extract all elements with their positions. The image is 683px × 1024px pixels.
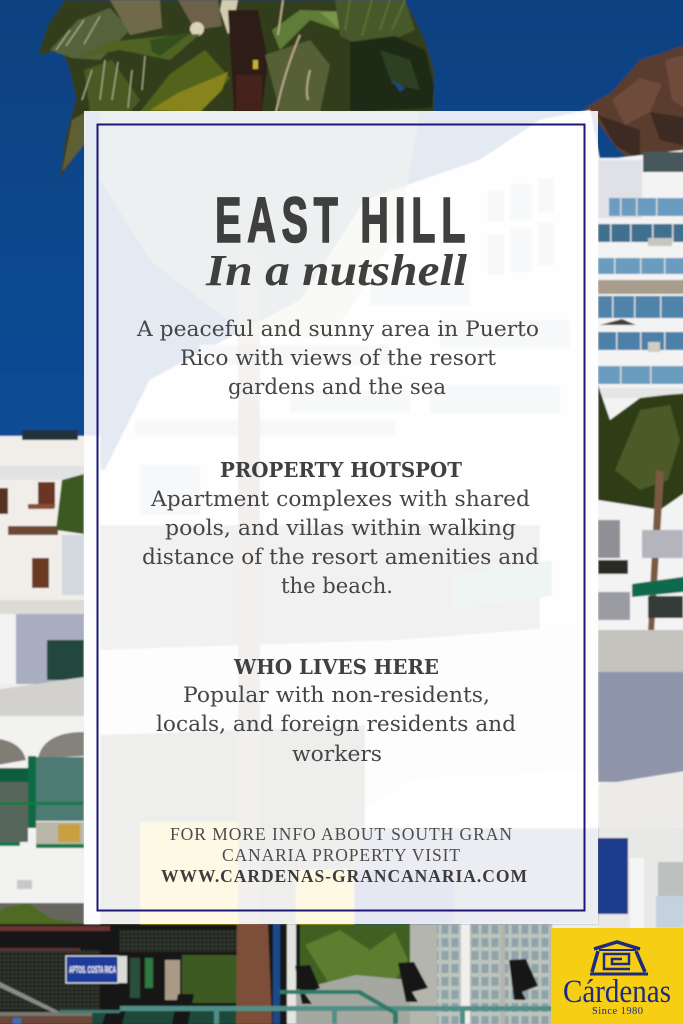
body: who lives here: workers xyxy=(292,742,382,766)
lower base wall colour xyxy=(0,470,683,940)
crown dense mass xyxy=(38,0,434,178)
panel inner border xyxy=(98,124,584,910)
footer call to action: FOR MORE INFO ABOUT SOUTH GRAN xyxy=(170,824,512,844)
footer call to action: CANARIA PROPERTY VISIT xyxy=(222,845,460,865)
body: who lives here xyxy=(156,683,516,766)
floodlights xyxy=(102,959,538,1024)
bright fan leaves xyxy=(78,34,200,60)
logo: Cardenas yellow badge xyxy=(551,928,683,1024)
trunk core xyxy=(228,10,268,112)
building window grid behind panel xyxy=(135,178,570,515)
palm trunk base xyxy=(236,924,272,1024)
pale dead fronds top xyxy=(110,0,162,35)
rocky hillside xyxy=(585,38,683,175)
wordmark: Cárdenas xyxy=(563,974,671,1010)
crown ghost tint under panel xyxy=(100,111,420,340)
panel: translucent white card xyxy=(84,111,598,924)
tagline: Since 1980 xyxy=(592,1006,643,1017)
intro text xyxy=(136,317,539,399)
right palm tree xyxy=(598,385,683,632)
mid garden behind panel xyxy=(100,525,540,650)
body: property hotspot: Apartment complexes with shared xyxy=(150,487,530,511)
thin pale frond lines xyxy=(56,16,145,108)
lower dark foliage behind panel xyxy=(100,725,365,925)
body: who lives here: locals, and foreign residents and xyxy=(156,712,516,736)
right apartment block xyxy=(598,158,683,633)
footer call to action xyxy=(161,824,527,886)
street sign: Costa Rica: APTOS. COSTA RICA xyxy=(69,965,116,976)
ground floor street xyxy=(0,924,552,1024)
central trunk ghost behind panel xyxy=(238,200,260,924)
body: who lives here: Popular with non-residents, xyxy=(183,683,490,707)
section: who lives here xyxy=(156,655,516,766)
intro text: A peaceful and sunny area in Puerto xyxy=(136,317,539,341)
body: property hotspot: pools, and villas within walking xyxy=(165,516,516,540)
right bright leaves xyxy=(272,10,366,50)
heading: who lives here: WHO LIVES HERE xyxy=(233,655,439,679)
left hanging fronds xyxy=(50,8,130,60)
heading: property hotspot: PROPERTY HOTSPOT xyxy=(220,458,463,482)
intro text: Rico with views of the resort xyxy=(180,346,497,370)
dark right fronds xyxy=(350,36,434,112)
foliage and wall, centre xyxy=(300,924,410,988)
subtitle: In a nutshell xyxy=(205,246,468,295)
body: property hotspot: the beach. xyxy=(281,574,393,598)
teal railings xyxy=(120,1006,552,1011)
section: property hotspot xyxy=(142,458,539,598)
icon: house with spiral xyxy=(590,942,648,974)
website link: WWW.CARDENAS-GRANCANARIA.COM xyxy=(161,866,527,886)
street sign: Costa Rica xyxy=(66,956,127,983)
sky xyxy=(0,0,683,480)
intro text: gardens and the sea xyxy=(228,375,446,399)
left terraced buildings xyxy=(0,436,100,606)
yellow signboards behind panel xyxy=(140,822,240,924)
upper main building behind panel xyxy=(100,110,683,640)
central palm crown xyxy=(38,0,434,340)
body: property hotspot: distance of the resort amenities and xyxy=(142,545,539,569)
title: EAST HILL xyxy=(215,186,465,256)
body: property hotspot xyxy=(142,487,539,598)
glass block facade xyxy=(410,924,552,1024)
florida sign behind panel xyxy=(452,560,552,610)
